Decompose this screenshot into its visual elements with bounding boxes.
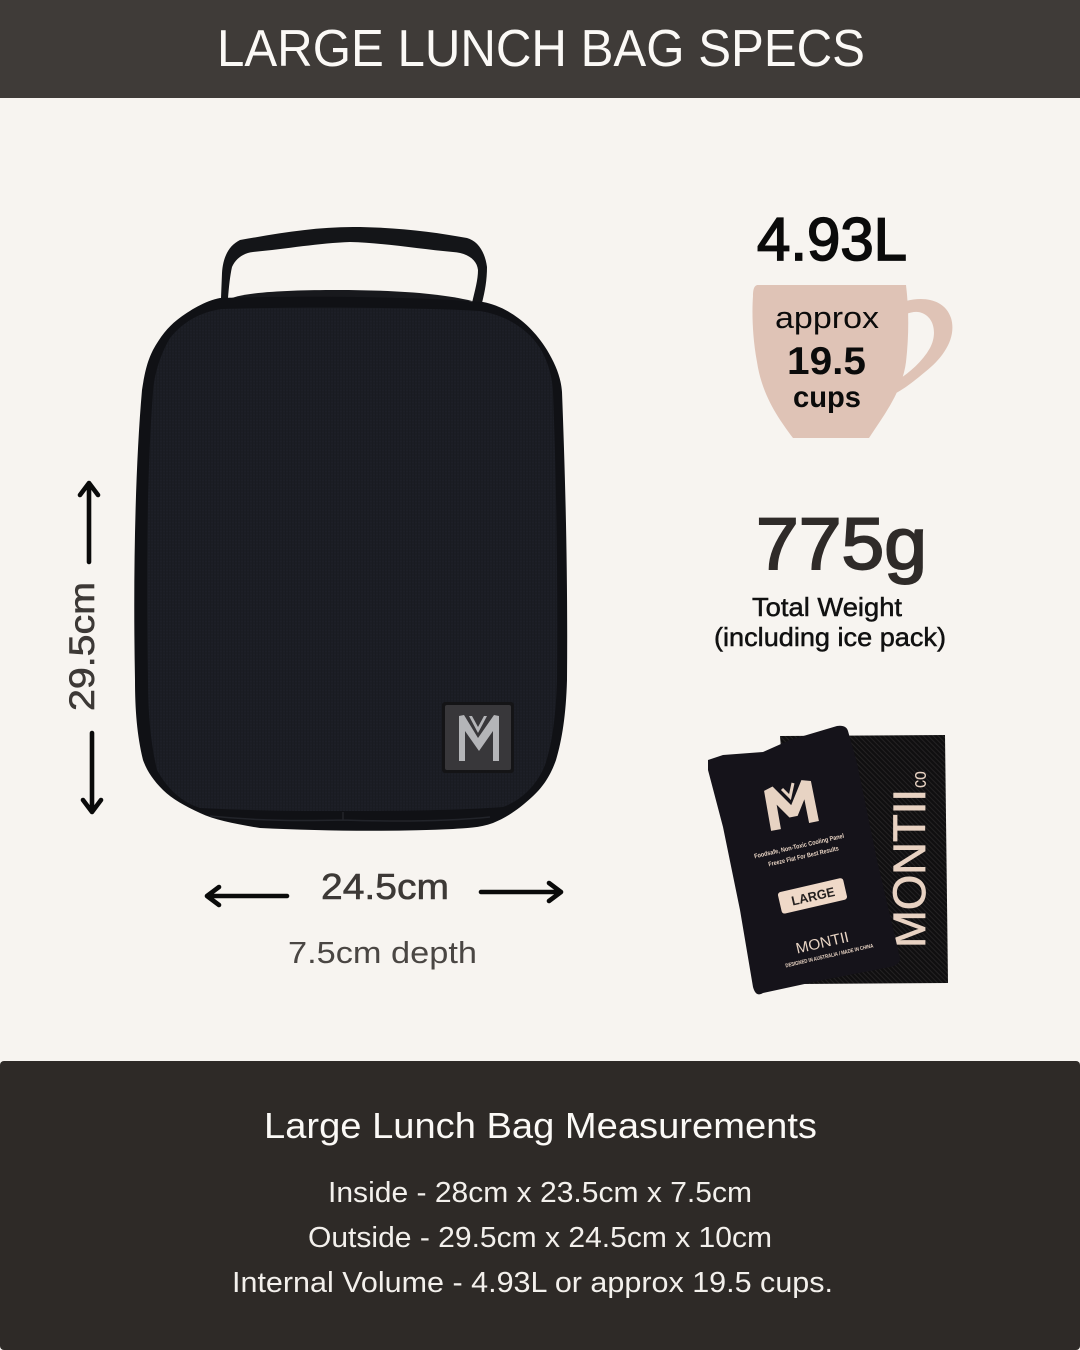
outside dimensions: Outside - 29.5cm x 24.5cm x 10cm <box>308 1222 772 1254</box>
bag top zipper <box>228 290 472 301</box>
volume figure: 4.93L <box>757 206 907 273</box>
title: LARGE LUNCH BAG SPECS <box>217 20 865 78</box>
sleeve co mark: co <box>909 771 931 788</box>
lunch bag <box>134 227 567 831</box>
cup text: cups: cups <box>793 381 861 414</box>
pack size tag <box>777 878 848 914</box>
pack brand: DESIGNED IN AUSTRALIA / MADE IN CHINA <box>785 943 874 969</box>
pack size tag: LARGE <box>790 884 837 909</box>
cooling pack <box>708 726 900 994</box>
left arrow <box>207 887 287 905</box>
pack brand <box>781 924 874 969</box>
bag handle <box>221 227 487 303</box>
bag front fabric panel <box>147 308 557 811</box>
pack small print: Foodsafe, Non-Toxic Cooling Panel <box>754 833 845 860</box>
depth label: 7.5cm depth <box>288 935 477 970</box>
inside dimensions: Inside - 28cm x 23.5cm x 7.5cm <box>328 1177 752 1209</box>
bag lower seam <box>210 812 490 821</box>
bag outer body <box>134 297 567 831</box>
pack brand: MONTII <box>794 929 851 958</box>
cup body <box>752 285 908 438</box>
weight caption: (including ice pack) <box>714 622 946 652</box>
width dimension <box>207 866 561 907</box>
patch M logo <box>459 715 499 761</box>
pack small print <box>754 833 847 871</box>
weight figure: 775g <box>756 504 927 585</box>
cup text: 19.5: 19.5 <box>787 340 866 383</box>
down arrow <box>83 733 101 812</box>
right arrow <box>481 883 561 901</box>
cup graphic <box>752 285 952 438</box>
height dimension <box>63 483 102 812</box>
sleeve brand text: MONTII <box>884 789 935 948</box>
internal volume: Internal Volume - 4.93L or approx 19.5 cups. <box>232 1267 833 1299</box>
pack small print: Freeze Flat For Best Results <box>768 845 840 868</box>
bag logo patch <box>442 702 514 773</box>
height label: 29.5cm <box>63 582 102 711</box>
pack M logo <box>769 782 814 830</box>
measurements panel <box>0 1061 1080 1350</box>
weight caption <box>714 592 946 652</box>
panel heading: Large Lunch Bag Measurements <box>264 1105 817 1146</box>
weight caption: Total Weight <box>752 592 903 622</box>
width label: 24.5cm <box>321 866 449 907</box>
header band <box>0 0 1080 98</box>
mesh sleeve <box>780 735 948 984</box>
ice pack product <box>708 726 948 994</box>
cup text: approx: approx <box>775 300 880 335</box>
cup handle <box>892 299 952 395</box>
up arrow <box>80 483 98 562</box>
